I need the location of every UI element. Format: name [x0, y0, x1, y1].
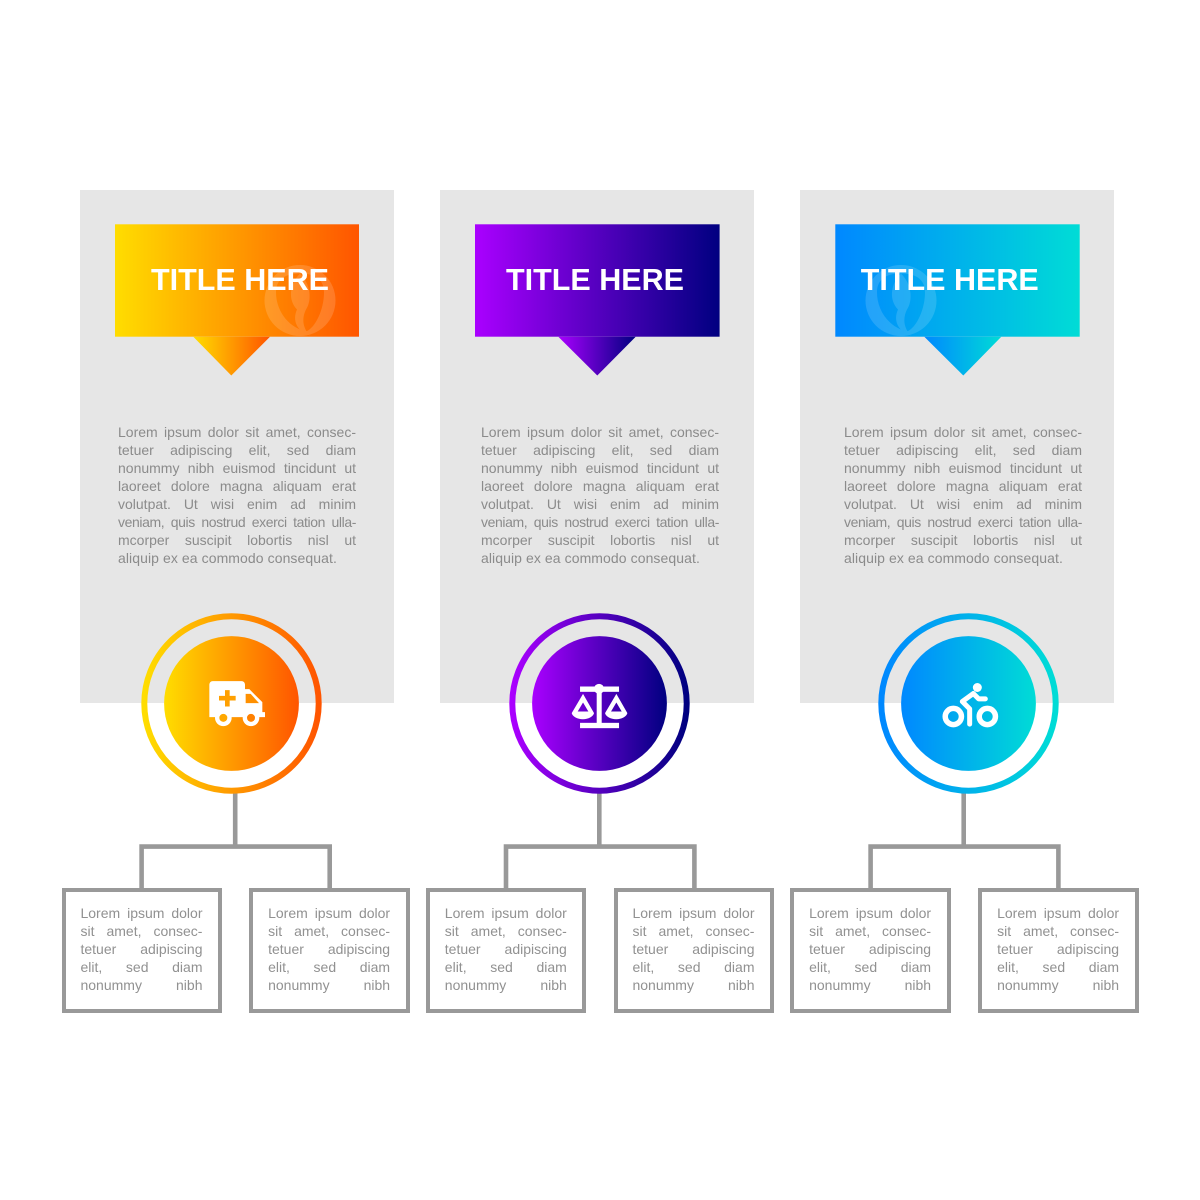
sub-box right: sit amet, consec-	[997, 923, 1119, 939]
icon: ambulance	[209, 681, 265, 726]
sub-box right: Lorem ipsum dolor	[997, 905, 1119, 921]
body text: veniam, quis nostrud exerci tation ulla-	[844, 514, 1082, 530]
body text: nonummy nibh euismod tincidunt ut	[118, 460, 356, 476]
body text: mcorper suscipit lobortis nisl ut	[844, 532, 1082, 548]
body text	[118, 424, 356, 566]
body text	[844, 424, 1082, 566]
sub-box left: elit, sed diam	[445, 959, 567, 975]
body text: aliquip ex ea commodo consequat.	[844, 550, 1063, 566]
badge: cyclist icon	[878, 613, 1059, 794]
body text: tetuer adipiscing elit, sed diam	[844, 442, 1082, 458]
body text: mcorper suscipit lobortis nisl ut	[118, 532, 356, 548]
sub-box left: Lorem ipsum dolor	[80, 905, 202, 921]
title banner: purple: TITLE HERE	[506, 263, 684, 297]
sub-box right: nonummy nibh	[997, 977, 1119, 993]
body text: Lorem ipsum dolor sit amet, consec-	[118, 424, 356, 440]
connector lines	[139, 794, 332, 888]
sub-box right: Lorem ipsum dolor	[632, 905, 754, 921]
title banner: blue	[835, 224, 1080, 376]
sub-box right: sit amet, consec-	[268, 923, 390, 939]
sub-box left: sit amet, consec-	[809, 923, 931, 939]
body text: volutpat. Ut wisi enim ad minim	[844, 496, 1082, 512]
panel: orange column background	[80, 190, 394, 703]
title banner: blue: TITLE HERE	[861, 263, 1039, 297]
body text: nonummy nibh euismod tincidunt ut	[844, 460, 1082, 476]
sub-box left: nonummy nibh	[445, 977, 567, 993]
title banner: orange	[115, 224, 359, 376]
body text: veniam, quis nostrud exerci tation ulla-	[118, 514, 356, 530]
sub-box right: nonummy nibh	[632, 977, 754, 993]
sub-box left: tetuer adipiscing	[80, 941, 202, 957]
sub-box right: tetuer adipiscing	[997, 941, 1119, 957]
sub-box left: Lorem ipsum dolor	[809, 905, 931, 921]
body text: tetuer adipiscing elit, sed diam	[481, 442, 719, 458]
body text	[481, 424, 719, 566]
sub-box left: Lorem ipsum dolor	[445, 905, 567, 921]
sub-box left: sit amet, consec-	[445, 923, 567, 939]
sub-box left: tetuer adipiscing	[445, 941, 567, 957]
body text: laoreet dolore magna aliquam erat	[118, 478, 356, 494]
sub-box left: sit amet, consec-	[80, 923, 202, 939]
panel: blue column background	[800, 190, 1114, 703]
body text: nonummy nibh euismod tincidunt ut	[481, 460, 719, 476]
body text: laoreet dolore magna aliquam erat	[844, 478, 1082, 494]
body text: aliquip ex ea commodo consequat.	[481, 550, 700, 566]
sub-box left	[426, 888, 586, 1013]
column 2: purple	[426, 190, 774, 1013]
body text: mcorper suscipit lobortis nisl ut	[481, 532, 719, 548]
sub-box left: nonummy nibh	[809, 977, 931, 993]
body text: Lorem ipsum dolor sit amet, consec-	[844, 424, 1082, 440]
column 1: orange	[62, 190, 410, 1013]
body text: volutpat. Ut wisi enim ad minim	[118, 496, 356, 512]
sub-box left	[62, 888, 222, 1013]
sub-box right	[978, 888, 1139, 1013]
badge: scales icon	[509, 613, 690, 794]
sub-box right	[614, 888, 774, 1013]
sub-box left: tetuer adipiscing	[809, 941, 931, 957]
body text: tetuer adipiscing elit, sed diam	[118, 442, 356, 458]
sub-box right: tetuer adipiscing	[632, 941, 754, 957]
connector lines	[868, 794, 1061, 888]
sub-box right	[249, 888, 410, 1013]
sub-box right: tetuer adipiscing	[268, 941, 390, 957]
body text: veniam, quis nostrud exerci tation ulla-	[481, 514, 719, 530]
sub-box right: Lorem ipsum dolor	[268, 905, 390, 921]
sub-box right: elit, sed diam	[632, 959, 754, 975]
sub-box right: nonummy nibh	[268, 977, 390, 993]
sub-box left: elit, sed diam	[809, 959, 931, 975]
body text: aliquip ex ea commodo consequat.	[118, 550, 337, 566]
sub-box right: elit, sed diam	[268, 959, 390, 975]
title banner: purple	[475, 224, 720, 376]
icon: cyclist	[945, 682, 995, 724]
column 3: blue	[790, 190, 1139, 1013]
title banner: orange: TITLE HERE	[151, 263, 329, 297]
sub-box left	[790, 888, 951, 1013]
body text: laoreet dolore magna aliquam erat	[481, 478, 719, 494]
body text: volutpat. Ut wisi enim ad minim	[481, 496, 719, 512]
body text: Lorem ipsum dolor sit amet, consec-	[481, 424, 719, 440]
icon: scales	[572, 683, 628, 728]
sub-box right: elit, sed diam	[997, 959, 1119, 975]
panel: purple column background	[440, 190, 754, 703]
sub-box left: elit, sed diam	[80, 959, 202, 975]
connector lines	[504, 794, 697, 888]
badge: ambulance icon	[141, 613, 322, 794]
sub-box left: nonummy nibh	[80, 977, 202, 993]
sub-box right: sit amet, consec-	[632, 923, 754, 939]
